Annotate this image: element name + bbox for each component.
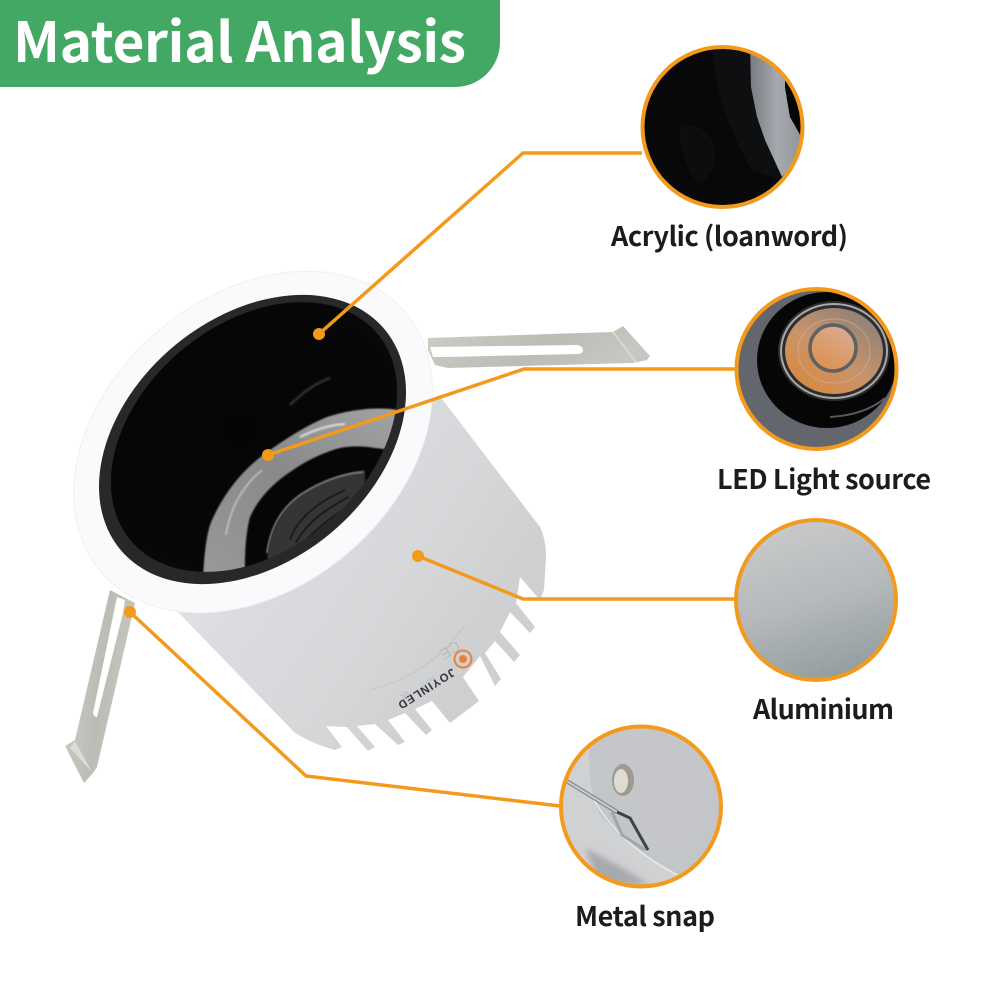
detail circle: aluminium [734, 518, 899, 683]
black reflector interior [110, 302, 398, 572]
label: acrylic: Acrylic (loanword) [610, 215, 848, 254]
logo text on body: IK [397, 687, 411, 702]
dark inner rim [42, 236, 463, 643]
detail circle: LED light source [735, 288, 900, 453]
callout line: metal snap [124, 606, 560, 806]
LED lens [267, 470, 365, 570]
logo text on body [370, 625, 472, 711]
bolt [612, 764, 634, 796]
label: aluminium: Aluminium [752, 688, 894, 727]
aluminium cylinder body with teeth [176, 395, 546, 751]
detail circle: acrylic [640, 45, 810, 210]
callout line: acrylic [313, 153, 642, 340]
callout line: aluminium [412, 550, 737, 599]
label: LED light source: LED Light source [717, 458, 931, 497]
metal wire [565, 780, 617, 812]
logo text on body: CE [436, 637, 463, 662]
downlight product photo [65, 271, 650, 783]
label: metal snap: Metal snap [575, 895, 715, 934]
grey acrylic ring [203, 409, 412, 578]
callout line: LED light source [262, 369, 737, 461]
logo text on body: RoHS [418, 674, 435, 688]
title banner: Material Analysis [13, 0, 466, 78]
left metal spring clip [65, 590, 135, 783]
detail circle: metal snap [559, 725, 724, 890]
logo text on body: JOYINLED [396, 665, 457, 711]
white flange ring [6, 201, 500, 683]
right metal spring clip [428, 326, 650, 368]
